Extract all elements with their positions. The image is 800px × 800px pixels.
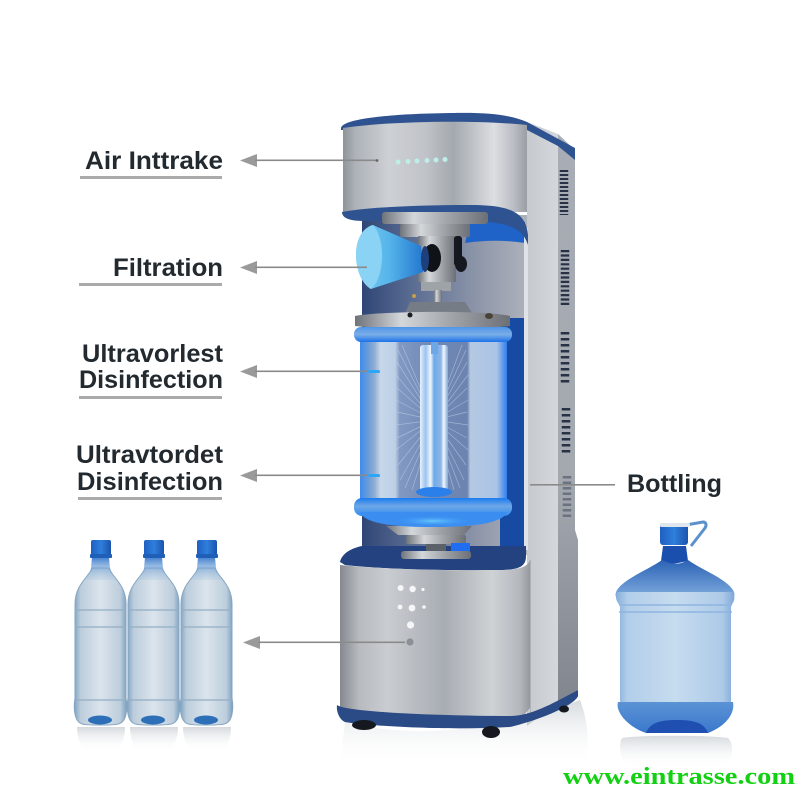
filter mechanism [382, 212, 488, 325]
jug shoulder [616, 560, 734, 598]
label: Ultravorlest Disinfection [79, 340, 224, 399]
large water jug [616, 522, 734, 768]
head unit [341, 113, 575, 245]
label: Ultravtordet Disinfection: Disinfection [77, 468, 223, 496]
arrow: filtration [240, 261, 367, 274]
jug base [618, 702, 733, 733]
jug cap [660, 524, 688, 545]
lower coupling [386, 526, 472, 559]
rings [354, 327, 512, 342]
bottle 3 [180, 540, 233, 752]
vents [564, 170, 567, 520]
arrow: air intake [240, 154, 378, 167]
label: Air Intake: Air Inttrake [85, 147, 223, 175]
blue upper recess [465, 222, 525, 243]
label: Bottling: Bottling [627, 470, 722, 498]
label: Ultravorlest Disinfection: Disinfection [79, 366, 223, 394]
arrow: ultravtordet [240, 469, 380, 482]
label: Filtration: Filtration [113, 254, 223, 282]
inner texture [396, 345, 468, 490]
base unit [337, 560, 578, 738]
bottle 2 [127, 540, 180, 752]
blue cone [356, 225, 429, 289]
arrow: ultravorlest [240, 365, 380, 378]
side column [524, 122, 578, 726]
machine reflection [340, 700, 588, 764]
base navy top [340, 546, 526, 570]
jug handle [686, 522, 706, 546]
blue side recess [500, 318, 526, 550]
tank lid [355, 312, 510, 328]
recess back wall [362, 215, 528, 555]
label: Ultravorlest Disinfection: Ultravorlest [82, 340, 224, 368]
label: Ultravtordet Disinfection: Ultravtordet [76, 441, 224, 469]
UV tube [420, 345, 448, 495]
bottle 1 [74, 540, 127, 752]
status lights [396, 157, 448, 164]
control dots [398, 585, 426, 629]
machine [337, 113, 578, 738]
watermark: www.eintrasse.com [563, 764, 795, 790]
jug body [616, 592, 734, 704]
label: Filtration [79, 254, 223, 286]
arrow: base output [243, 636, 414, 649]
pointer: bottling [530, 484, 615, 486]
jug reflection [620, 736, 732, 768]
jug neck [661, 546, 688, 565]
label: Ultravtordet Disinfection [76, 441, 224, 500]
water tank [354, 327, 512, 527]
small bottles [74, 540, 233, 752]
